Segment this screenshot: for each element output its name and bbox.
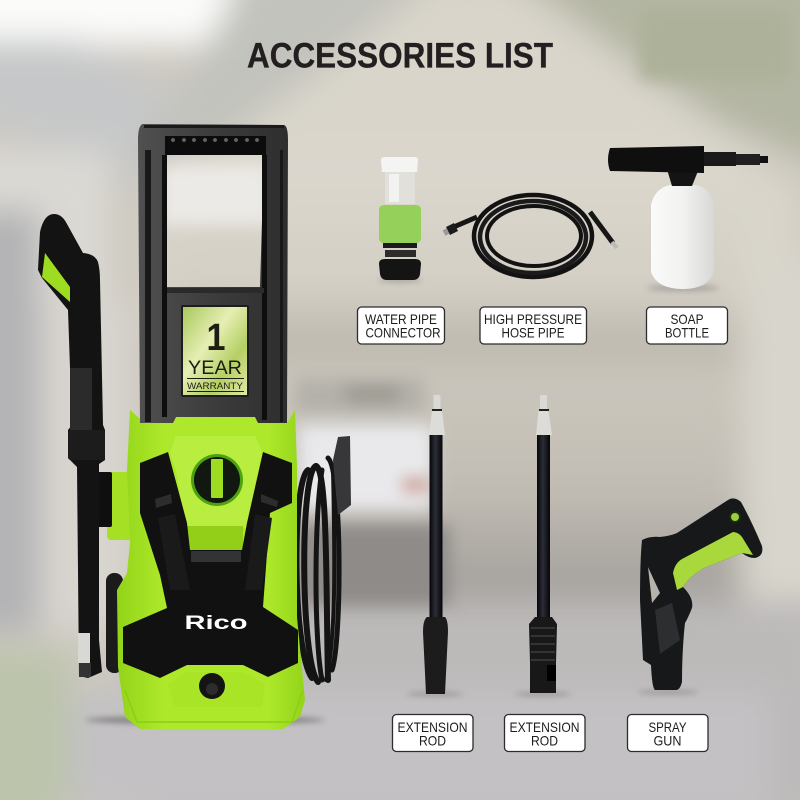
label: high pressure hose pipe: HOSE PIPE xyxy=(502,324,564,340)
label: high pressure hose pipe xyxy=(480,307,586,344)
warranty badge: YEAR xyxy=(188,357,242,379)
label: water pipe connector: WATER PIPE xyxy=(365,311,437,327)
extension rod 1 xyxy=(407,395,463,696)
soap bottle xyxy=(608,146,768,291)
hose coil and hook xyxy=(296,436,351,682)
label: spray gun: SPRAY xyxy=(648,719,687,735)
brand logo: Rico xyxy=(184,613,248,634)
lime green body xyxy=(117,410,305,729)
label: extension rod 2 xyxy=(504,714,585,752)
side water inlet and wheel xyxy=(95,472,137,673)
pressure washer with warranty badge xyxy=(38,124,351,729)
label: soap bottle: SOAP xyxy=(670,311,704,327)
black front panel xyxy=(123,452,298,678)
pressure dial xyxy=(191,454,243,506)
label: water pipe connector xyxy=(358,307,444,344)
tall handle frame xyxy=(138,124,288,423)
label: extension rod 2: ROD xyxy=(531,732,558,748)
spray gun and lance holstered xyxy=(38,214,105,678)
label: extension rod 1: EXTENSION xyxy=(398,719,468,735)
high pressure hose pipe xyxy=(444,195,617,277)
label: spray gun: GUN xyxy=(654,732,682,748)
warranty badge: 1 xyxy=(206,317,226,359)
label: extension rod 1: ROD xyxy=(419,732,446,748)
lower body detail and outlet xyxy=(125,672,303,722)
water pipe connector xyxy=(378,157,422,282)
spray gun xyxy=(638,498,762,694)
label: water pipe connector: CONNECTOR xyxy=(366,324,440,340)
warranty badge xyxy=(181,305,249,397)
extension rod 2 xyxy=(515,395,571,696)
label: extension rod 2: EXTENSION xyxy=(510,719,580,735)
label: extension rod 1 xyxy=(392,714,473,752)
raised top panel xyxy=(170,436,262,528)
label: soap bottle xyxy=(646,307,728,344)
label: soap bottle: BOTTLE xyxy=(665,324,709,340)
label: spray gun xyxy=(628,714,708,752)
label: high pressure hose pipe: HIGH PRESSURE xyxy=(484,311,582,327)
title: ACCESSORIES LIST xyxy=(247,36,553,76)
warranty badge: WARRANTY xyxy=(187,381,244,392)
